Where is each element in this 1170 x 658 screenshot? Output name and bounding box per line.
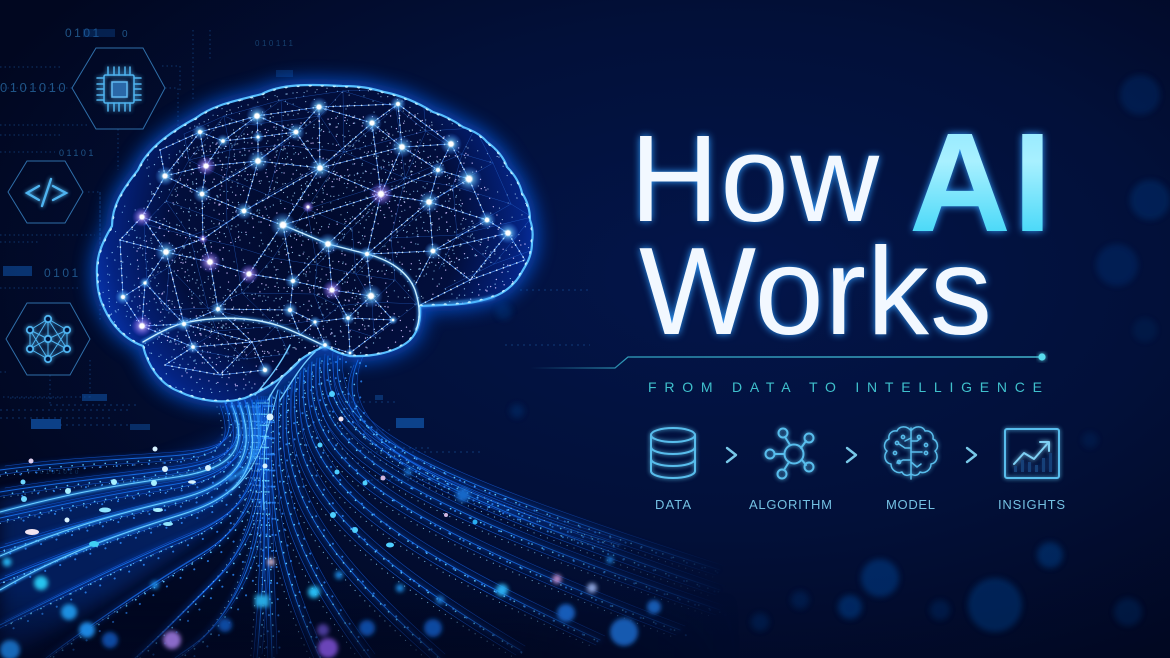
network nodes violet [131,156,393,337]
step labels: DATA [655,497,691,512]
icon: network hexagon [6,303,90,375]
title: How AI Works: AI [909,103,1054,261]
binary labels: 010111 [255,39,296,48]
step labels: MODEL [886,497,935,512]
binary labels: 0 [122,29,130,40]
subtitle: FROM DATA TO INTELLIGENCE [648,379,1042,395]
data fibers [0,352,728,658]
arrow [967,448,976,462]
step labels [655,497,1065,512]
title: How AI Works: Works [639,223,993,361]
brain fill and outline [97,85,533,401]
bottom vignette [0,594,675,658]
bokeh lights [496,75,1170,632]
binary labels: 0101010 [0,80,68,95]
title: How AI Works: How [630,111,881,248]
binary labels [0,26,296,476]
arrow [727,448,736,462]
icon: code hexagon [8,161,83,223]
title: How AI Works [630,103,1054,361]
binary labels: 0101 [44,266,81,280]
icon: chip hexagon [72,48,165,129]
bright particles [20,391,478,548]
icon: model brain [885,427,937,479]
glowing particles [0,468,661,658]
circuit background [0,30,590,480]
icon: insights chart [1005,429,1059,478]
brain [94,82,555,401]
bottom-left stream glow [0,420,262,658]
network nodes halos [115,96,519,378]
step labels: ALGORITHM [749,497,832,512]
brain outer glow [97,85,533,401]
binary labels: 01101 [59,148,96,158]
icon: algorithm [766,428,814,478]
rule with end dot [530,353,1046,368]
binary labels: 0101010 [40,470,81,476]
data chips [3,29,424,430]
brain rim beads [97,85,533,401]
brain folds [143,225,493,400]
step labels: INSIGHTS [998,497,1065,512]
process flow [651,427,1065,512]
arrow [847,448,856,462]
icon: database [651,428,695,478]
binary labels: 0101 [65,26,102,40]
brain mesh [94,82,555,393]
